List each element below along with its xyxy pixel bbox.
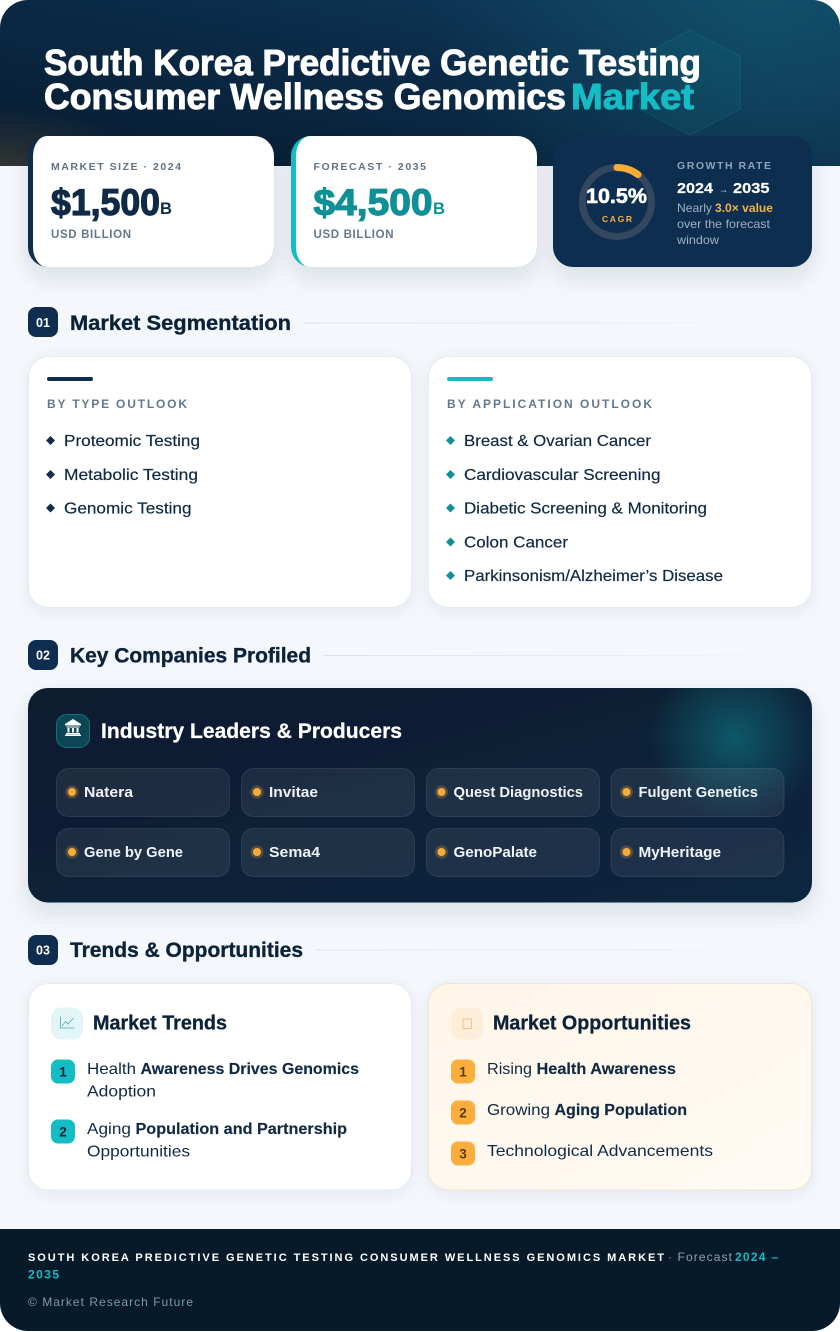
title <box>44 42 701 117</box>
icon: bank <box>56 714 90 748</box>
CAGR ring: CAGR <box>602 214 632 224</box>
CAGR ring: 10.5% <box>586 184 647 208</box>
section heading 03: Trends & Opportunities <box>70 938 303 962</box>
stat card: market size: B <box>160 199 172 218</box>
icon: missing glyph box <box>451 1008 483 1040</box>
opportunity 2: 2 <box>459 1106 467 1120</box>
panel: by application outlook: BY APPLICATION OUTLOOK <box>447 397 652 411</box>
type list: Metabolic Testing <box>64 467 198 484</box>
company chips: Gene by Gene <box>84 845 183 861</box>
growth text: over the forecast <box>677 217 771 231</box>
icon: chart <box>51 1008 83 1040</box>
opportunity 1: Health Awareness <box>536 1061 676 1078</box>
footer: 2035 <box>28 1268 59 1282</box>
opportunity 3: Technological Advancements <box>487 1143 713 1160</box>
growth text <box>676 160 773 247</box>
CAGR ring <box>582 167 652 236</box>
company chips: Natera <box>84 785 134 801</box>
application list: Breast & Ovarian Cancer <box>464 433 651 450</box>
section heading 01 <box>28 307 812 337</box>
panel: by type outlook <box>28 356 412 608</box>
panel: market opportunities <box>428 984 812 1190</box>
trend 1 <box>51 1060 359 1100</box>
trend 2: 2 <box>59 1124 67 1140</box>
opportunity 1: Rising <box>487 1061 532 1078</box>
opportunity 2: Growing <box>487 1102 550 1119</box>
application list: Colon Cancer <box>464 534 568 552</box>
stat card: forecast <box>291 136 537 267</box>
section heading 02: 02 <box>36 648 50 662</box>
footer: © Market Research Future <box>28 1295 193 1309</box>
hexagon decoration <box>640 30 740 135</box>
panel: key companies: Industry Leaders & Producers <box>101 719 402 743</box>
title: South Korea Predictive Genetic Testing <box>44 42 701 83</box>
panel: key companies <box>28 688 812 902</box>
opportunity 2 <box>451 1100 687 1124</box>
trend 2: Population and Partnership <box>136 1121 347 1138</box>
panel: market trends: Market Trends <box>93 1012 227 1034</box>
company chips: MyHeritage <box>638 845 721 861</box>
opportunity 3: 3 <box>459 1146 467 1162</box>
section heading 03: 03 <box>36 944 50 958</box>
trend 2 <box>51 1120 347 1160</box>
footer: 2024 – <box>735 1250 778 1264</box>
opportunity 1: 1 <box>459 1064 467 1080</box>
growth text: 3.0× value <box>715 201 773 215</box>
stat card: forecast: FORECAST · 2035 <box>314 161 426 173</box>
growth text: 2024 <box>677 180 714 197</box>
company chips: Quest Diagnostics <box>454 785 583 801</box>
growth text: 2035 <box>733 180 770 197</box>
application list: Diabetic Screening & Monitoring <box>464 500 707 518</box>
company chips: Sema4 <box>269 845 321 861</box>
stat card: forecast: USD BILLION <box>314 229 394 241</box>
growth text: GROWTH RATE <box>677 160 771 172</box>
type list: Proteomic Testing <box>64 433 200 450</box>
application list: Parkinsonism/Alzheimer’s Disease <box>464 568 723 585</box>
opportunity 2: Aging Population <box>554 1102 687 1119</box>
stat card: growth rate <box>553 136 812 267</box>
panel: market trends <box>28 984 412 1190</box>
section heading 02 <box>28 640 812 670</box>
stat card: market size: USD BILLION <box>51 229 131 241</box>
opportunity 3 <box>451 1142 713 1166</box>
panel: market opportunities: Market Opportunities <box>493 1012 691 1034</box>
trend 1: Health <box>87 1061 136 1078</box>
application list: Cardiovascular Screening <box>464 467 660 484</box>
title: Market <box>571 76 694 117</box>
trend 1: Adoption <box>87 1084 156 1100</box>
stat card: forecast: $4,500 <box>314 182 432 223</box>
trend 2: Aging <box>87 1121 131 1138</box>
company chips: Invitae <box>269 785 318 801</box>
section heading 01: 01 <box>36 316 50 330</box>
footer: · Forecast <box>668 1250 733 1264</box>
section heading 01: Market Segmentation <box>70 311 291 335</box>
growth text: window <box>676 233 719 247</box>
footer <box>0 1229 840 1331</box>
stat card: market size: MARKET SIZE · 2024 <box>51 161 181 173</box>
footer: SOUTH KOREA PREDICTIVE GENETIC TESTING CONSUMER WELLNESS GENOMICS MARKET <box>28 1252 664 1264</box>
section heading 02: Key Companies Profiled <box>70 644 311 668</box>
application list <box>446 433 723 585</box>
type list: Genomic Testing <box>64 500 192 518</box>
company chips: Fulgent Genetics <box>638 785 758 801</box>
trend 2: Opportunities <box>87 1144 190 1160</box>
trend 1: 1 <box>59 1064 67 1080</box>
stat card: market size <box>28 136 274 267</box>
growth text: Nearly <box>677 201 712 215</box>
opportunity 1 <box>451 1060 676 1084</box>
stat card: forecast: B <box>433 199 445 218</box>
stat card: market size: $1,500 <box>51 182 160 223</box>
section heading 03 <box>28 935 812 965</box>
company chips: GenoPalate <box>454 845 537 861</box>
panel: by type outlook: BY TYPE OUTLOOK <box>47 397 187 411</box>
growth text: → <box>719 182 728 196</box>
title: Consumer Wellness Genomics <box>44 76 566 117</box>
panel: by application outlook <box>428 356 812 608</box>
type list <box>46 433 200 518</box>
trend 1: Awareness Drives Genomics <box>140 1061 359 1078</box>
header banner <box>0 0 840 166</box>
company chips <box>56 768 784 876</box>
